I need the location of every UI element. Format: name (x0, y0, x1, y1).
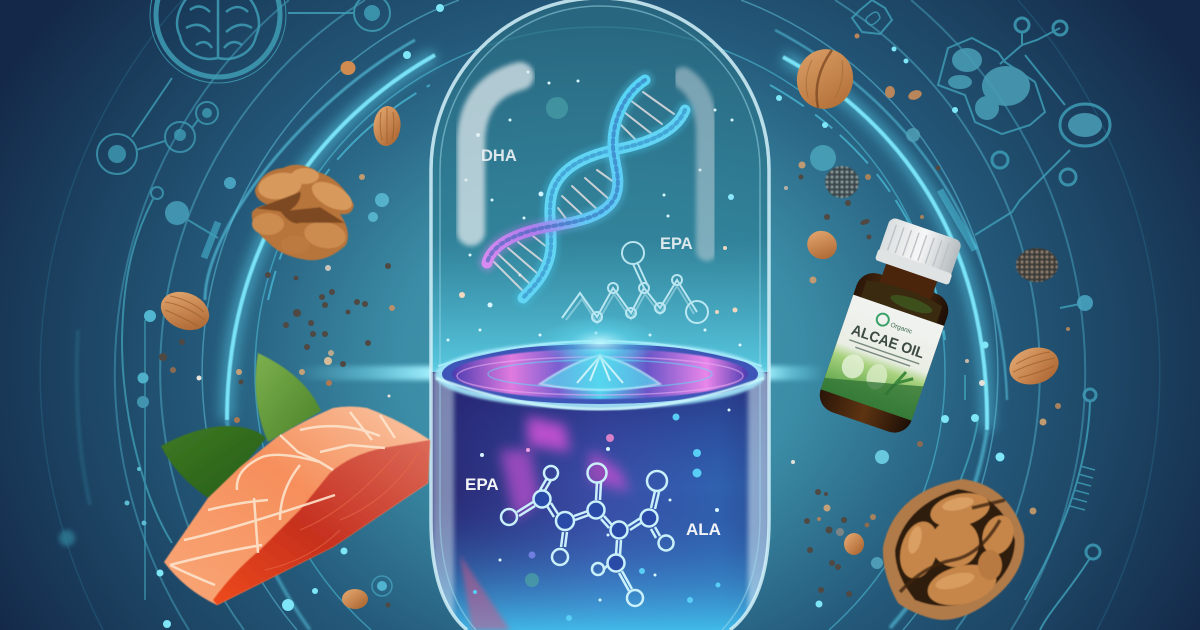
capsule (431, 0, 770, 630)
bright left arc (227, 55, 435, 420)
walnut kernel upper left (252, 165, 357, 260)
almond: left (155, 285, 215, 337)
liquid surface (435, 316, 765, 409)
salmon veins (170, 412, 395, 585)
icon: leaf left (161, 426, 266, 498)
salmon body (164, 406, 430, 605)
label: ALA: ALA (686, 520, 721, 539)
bottle label: Organic (889, 322, 914, 336)
label: EPA upper: EPA (660, 235, 693, 253)
almond far right (1005, 342, 1063, 390)
almond: small top (340, 61, 356, 75)
salmon red side (213, 440, 430, 605)
glass highlights (471, 76, 520, 232)
capsule upper glass (431, 0, 769, 400)
stars inside capsule (446, 70, 742, 621)
bottle neck (879, 258, 939, 302)
bottle glass (815, 268, 953, 437)
bottle cap (875, 216, 964, 285)
almond right of capsule (802, 226, 842, 264)
horizontal light flares (296, 366, 824, 380)
molecule: lower chain (501, 464, 674, 606)
chia seed clusters right (784, 162, 1070, 597)
glass side walls (432, 372, 454, 630)
walnut whole top right (790, 43, 860, 115)
hazelnut lower (342, 576, 392, 609)
bright right arc (783, 57, 987, 430)
rungs (494, 92, 674, 292)
almond: upper left (372, 105, 402, 147)
icon: leaf right (256, 353, 321, 442)
pale orb (546, 97, 568, 119)
bottle label (821, 295, 944, 420)
molecule: EPA upper (562, 242, 708, 323)
chia seeds left (159, 174, 395, 608)
left circuit network (59, 78, 218, 600)
icon: brain circuit (150, 0, 390, 83)
liquid body (431, 372, 770, 630)
small nut lower right (844, 533, 864, 555)
label: EPA lower: EPA (465, 475, 499, 494)
bottle label: ALCAE OIL (849, 322, 926, 362)
glowing side nodes (156, 4, 1004, 628)
label: DHA: DHA (481, 147, 517, 165)
walnut half lower right (883, 479, 1024, 620)
right circuit network with molecule icons (810, 0, 1110, 630)
small nuts top right (854, 34, 923, 102)
supplement bottle: algae oil (815, 213, 972, 437)
DNA helix (487, 80, 685, 298)
salmon fillet with leaves (161, 353, 430, 605)
magenta clouds (500, 416, 630, 520)
